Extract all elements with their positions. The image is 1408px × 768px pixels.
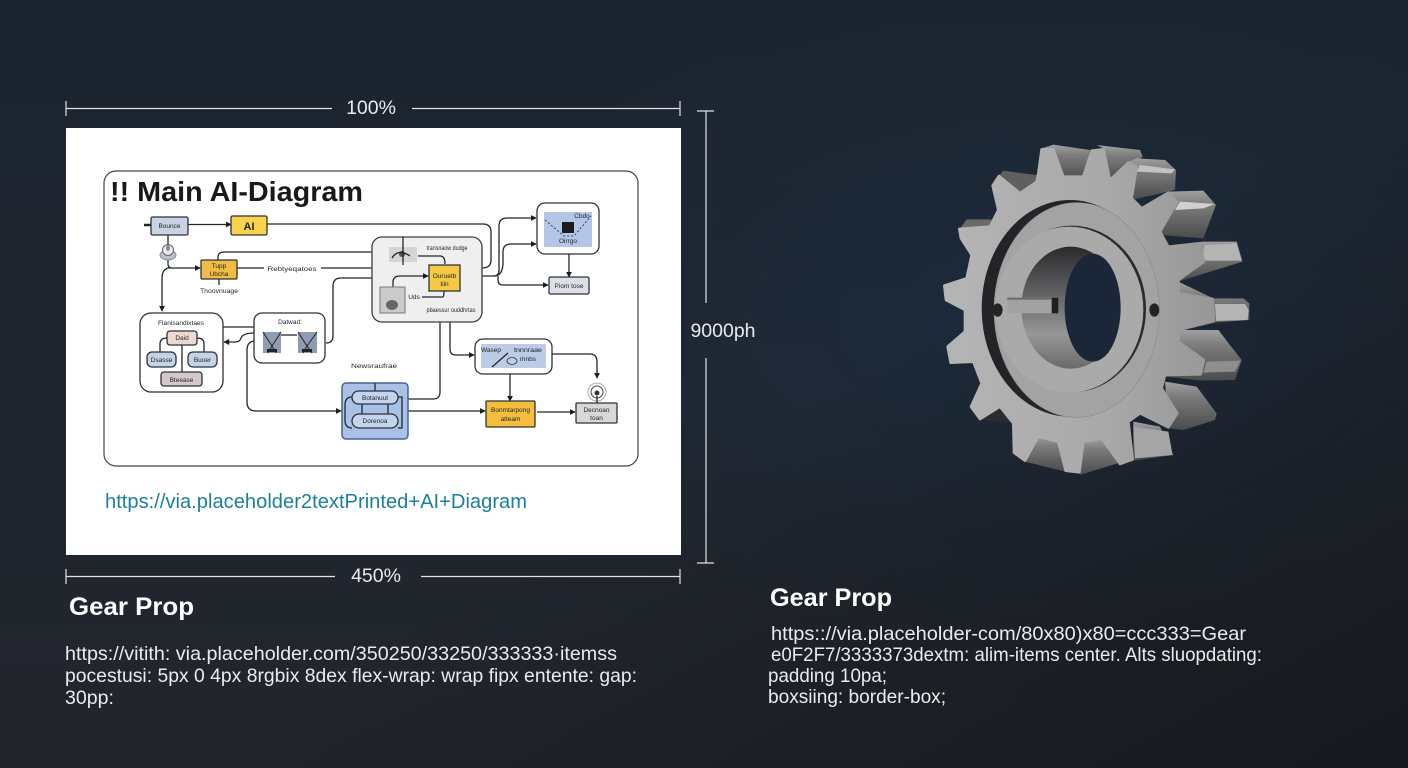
top dimension line: 100% [66, 97, 680, 119]
gear bright tooth facets [1133, 165, 1249, 458]
panel: top-right image node: Cbdo [574, 213, 590, 220]
yellow process node: Tupp [212, 263, 227, 270]
panel: dataset [254, 313, 325, 363]
label: relay: Rebtyeqatoes [268, 266, 317, 273]
gray decision node: Decnoan [583, 407, 610, 414]
AI node [231, 216, 267, 235]
output node: Piom tose [555, 283, 584, 290]
top dimension line: 100%: 100% [346, 97, 396, 119]
left caption body: https://vitith: via.placeholder.com/350250/33250/333333·itemss [65, 643, 617, 665]
left caption body: pocestusi: 5px 0 4px 8rgbix 8dex flex-wrap: wrap fipx entente: gap: [65, 665, 637, 687]
panel: left cluster: Buuer [194, 357, 212, 364]
output node [549, 277, 589, 294]
panel: blue module: Dorenoa [363, 418, 388, 425]
source node [151, 217, 188, 235]
gear recess [982, 200, 1158, 417]
panel: left cluster: Dsasse [151, 357, 173, 364]
left caption [65, 593, 637, 709]
left caption heading: Gear Prop [69, 593, 194, 621]
panel: blue module [342, 383, 408, 439]
panel: left cluster [140, 313, 223, 392]
panel: top-right image node [537, 203, 599, 254]
gear teeth side walls [960, 145, 1249, 475]
panel: top-right image node: Oirrgo [559, 238, 577, 245]
right dimension line: 9000ph [690, 111, 756, 563]
panel: mid-right node: tnnnraae [514, 347, 542, 354]
panel: central process: Uds [408, 294, 421, 301]
panel: central process [372, 237, 482, 322]
panel: dataset: Datwad: [278, 319, 302, 326]
right caption body [768, 623, 1262, 708]
yellow process node [201, 260, 237, 279]
right caption body: boxsiing: border-box; [768, 686, 946, 708]
gear keyway [1007, 298, 1058, 313]
panel: central process: tiin [440, 281, 449, 288]
gray decision node [576, 403, 617, 423]
yellow output node: Bonmtarpong [491, 407, 530, 414]
icon: sensor [160, 244, 176, 260]
right caption [768, 584, 1262, 708]
right dimension line: 9000ph: 9000ph [690, 320, 756, 342]
yellow output node: atteam [501, 416, 520, 423]
right caption body: e0F2F7/3333373dextm: alim-items center. Alts sluopdating: [771, 644, 1262, 666]
panel: mid-right node [475, 339, 552, 374]
diagram frame [104, 171, 638, 466]
right caption body: padding 10pa; [768, 665, 887, 687]
panel: blue module: Botanuut [362, 395, 388, 402]
left caption body [65, 643, 637, 709]
right caption body: https:://via.placeholder-com/80x80)x80=ccc333=Gear [771, 623, 1247, 645]
gear bore [1021, 247, 1120, 369]
panel: left cluster: Daid [175, 335, 189, 342]
AI node: AI [244, 221, 254, 233]
gray decision node: toan [590, 415, 603, 422]
panel: main diagram card [66, 128, 681, 555]
yellow output node [486, 401, 535, 427]
connector arrows [144, 218, 597, 412]
gear front face [944, 149, 1214, 472]
label: knowledge: Thoovnuage [200, 288, 238, 295]
flowchart [140, 203, 617, 439]
panel: central process: transnaow dudge [426, 245, 468, 252]
panel: central process: Ouruetb [433, 273, 457, 280]
panel: mid-right node: Wasep [481, 347, 501, 354]
bottom dimension line: 450% [66, 565, 680, 587]
yellow process node: Ubcha [210, 271, 229, 278]
panel: central process: pbaessur ouddhrtas [426, 307, 476, 314]
panel: left cluster: Bteease [170, 377, 194, 384]
panel: left cluster: Flanisandixtaes [158, 320, 205, 327]
panel: mid-right node: mnbs [520, 356, 537, 363]
gear raised boss [998, 226, 1146, 392]
gear screw holes [993, 303, 1003, 317]
diagram title: !! Main AI-Diagram [110, 176, 363, 207]
left caption body: 30pp: [65, 687, 114, 709]
bottom dimension line: 450%: 450% [351, 565, 401, 587]
source node: Bounce [158, 223, 181, 230]
icon: 3D metal gear [944, 145, 1249, 475]
label: network: Newsraufrae [351, 363, 397, 370]
icon: target sensor [588, 383, 606, 403]
right caption heading: Gear Prop [770, 584, 892, 612]
placeholder link text: https://via.placeholder2textPrinted+AI+Diagram [105, 491, 527, 513]
